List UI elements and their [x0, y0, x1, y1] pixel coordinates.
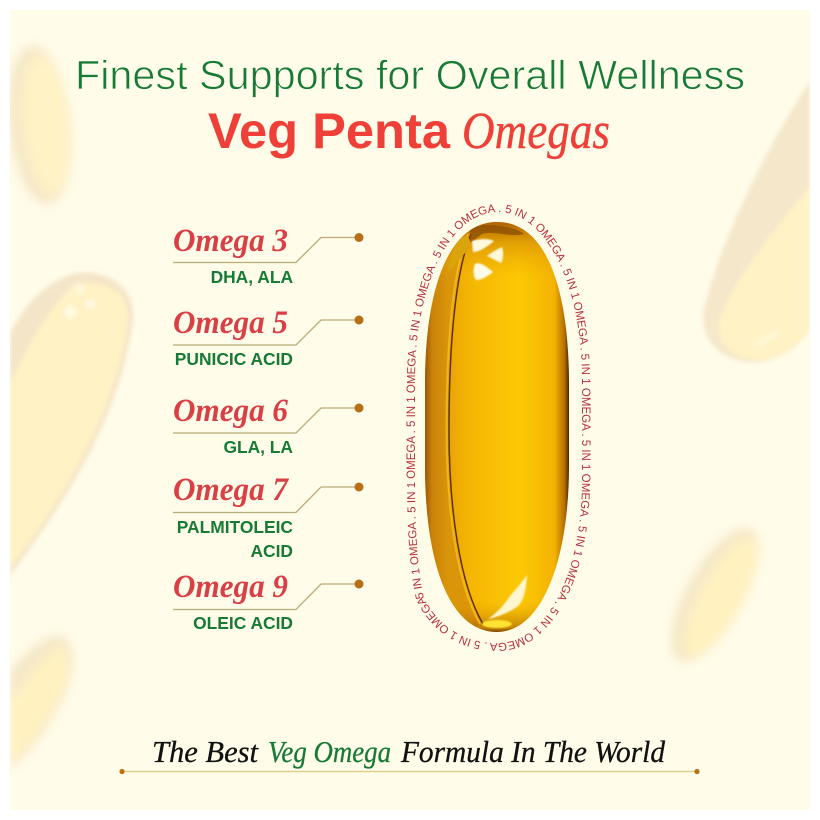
blurred capsule: middle left — [10, 273, 133, 575]
heading: Veg Penta Omegas: Veg Penta — [208, 103, 451, 159]
callout: Omega 9 — [173, 569, 364, 633]
heading: Veg Penta Omegas — [208, 103, 610, 160]
callout: Omega 9: OLEIC ACID — [193, 613, 293, 633]
callout: Omega 3 — [173, 223, 364, 287]
title: Finest Supports for Overall Wellness — [75, 52, 745, 98]
circular text ring: 5 IN 1 OMEGA . 5 IN 1 OMEGA . 5 IN 1 OMEGA . 5 IN 1 OMEGA . 5 IN 1 OMEGA . 5 IN 1 OMEGA . 5 IN 1 OMEGA . 5 IN 1 OMEGA . 5 IN 1 OMEGA . 5 IN 1 OMEGA . 5 IN 1 OMEGA . 5 IN 1 OMEGA — [406, 204, 590, 651]
icon: golden softgel capsule — [425, 222, 569, 632]
callout: Omega 6 — [173, 393, 364, 457]
blurred capsule: top right — [703, 82, 810, 362]
callout: Omega 5 — [173, 305, 364, 369]
blurred capsule: lower right — [668, 526, 763, 665]
callout: Omega 3: Omega 3 — [173, 223, 288, 259]
blurred capsule: top left — [10, 43, 76, 207]
callout: Omega 9: Omega 9 — [173, 569, 288, 605]
callout: Omega 5: Omega 5 — [173, 305, 288, 341]
tagline: Formula In The World — [400, 734, 665, 769]
callout: Omega 7: Omega 7 — [173, 472, 289, 508]
highlights on capsule — [472, 239, 527, 628]
callout: Omega 3: DHA, ALA — [211, 267, 293, 287]
heading: Veg Penta Omegas: Omegas — [462, 103, 610, 160]
tagline: The Best — [152, 734, 259, 769]
tagline underline with end dots — [119, 769, 700, 774]
tagline — [152, 734, 665, 769]
blurred capsule: bottom left — [10, 635, 73, 768]
callout: Omega 7: ACID — [250, 541, 293, 561]
callout: Omega 6: GLA, LA — [223, 437, 293, 457]
callout: Omega 7 — [173, 472, 364, 561]
callout: Omega 7: PALMITOLEIC — [177, 517, 293, 537]
callout: Omega 6: Omega 6 — [173, 393, 288, 429]
callout: Omega 5: PUNICIC ACID — [175, 349, 293, 369]
tagline: Veg Omega — [268, 734, 391, 769]
